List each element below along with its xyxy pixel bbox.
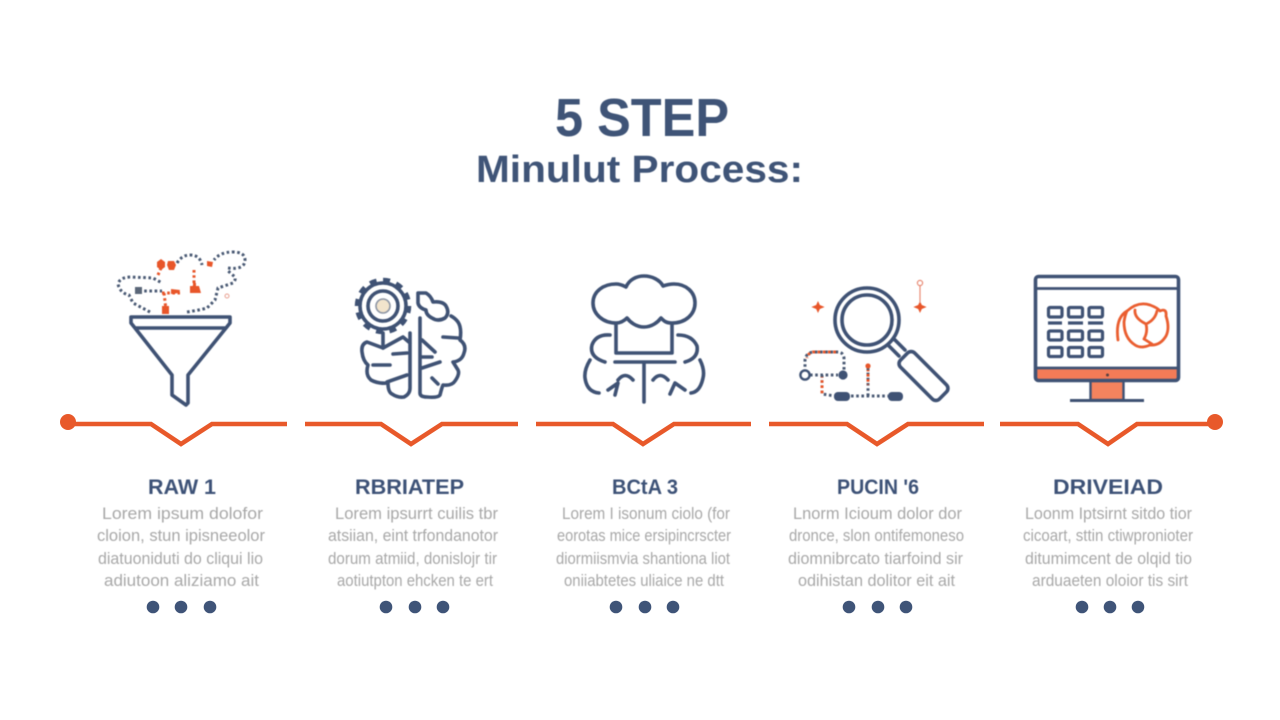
- timeline: [60, 414, 1223, 444]
- description: diomnibrcato tiarfoind sir: [788, 550, 963, 568]
- orange brain chart: [1117, 304, 1168, 347]
- step 4 text: [788, 476, 964, 590]
- step 3 text: [556, 476, 731, 590]
- step 2 text: [328, 476, 499, 590]
- brain outline: [585, 335, 704, 395]
- description: Lorem I isonum ciolo (for: [562, 505, 730, 523]
- description: cloion, stun ipisneeolor: [97, 527, 265, 545]
- description: odihistan dolitor eit ait: [798, 572, 955, 590]
- icon: chef hat brain: [585, 276, 704, 402]
- description: aotiutpton ehcken te ert: [337, 572, 493, 590]
- network nodes: [800, 352, 903, 401]
- segment 2: [305, 424, 518, 444]
- icon: dashboard monitor: [1036, 276, 1178, 402]
- step 3 dots: [610, 601, 679, 613]
- step 4 dots: [843, 601, 912, 613]
- segment 4: [769, 424, 984, 444]
- title: 5 STEP: [555, 88, 729, 148]
- description: atsiian, eint trfondanotor: [328, 527, 498, 545]
- segment 3: [536, 424, 751, 444]
- description: [97, 505, 265, 590]
- brain left half: [362, 333, 410, 397]
- heading: RAW 1: [148, 476, 216, 499]
- description: diormiismvia shantiona liot: [556, 550, 730, 568]
- magnifying glass: [835, 288, 950, 403]
- step 5 dots: [1076, 601, 1144, 613]
- segment 1: [68, 424, 287, 444]
- description: [328, 505, 499, 590]
- heading: DRIVEIAD: [1053, 476, 1163, 499]
- description: Lnorm Icioum dolor dor: [793, 505, 962, 523]
- heading: PUCIN '6: [837, 476, 919, 499]
- description: dorum atmiid, donislojr tir: [328, 550, 497, 568]
- funnel body: [131, 317, 230, 405]
- description: ditumimcent de olqid tio: [1025, 550, 1192, 568]
- gear: [357, 280, 409, 348]
- description: Lorem ipsum dolofor: [102, 505, 264, 523]
- description: eorotas mice ersipincrscter: [557, 527, 731, 545]
- description: [788, 505, 964, 590]
- description: diatuoniduti do cliqui lio: [98, 550, 263, 568]
- icon: funnel with scattered data: [118, 252, 245, 405]
- step 2 dots: [380, 601, 449, 613]
- monitor frame: [1036, 276, 1178, 402]
- title: Minulut Process:: [476, 149, 803, 191]
- heading: RBRIATEP: [355, 476, 464, 499]
- chef hat: [593, 276, 695, 402]
- description: adiutoon aliziamo ait: [104, 572, 259, 590]
- title: [476, 88, 803, 191]
- brain right half: [418, 293, 465, 397]
- start node: [60, 414, 76, 430]
- heading: BCtA 3: [612, 476, 678, 499]
- step 1 text: [97, 476, 265, 590]
- segment 5: [1000, 424, 1215, 444]
- description: dronce, slon ontifemoneso: [789, 527, 964, 545]
- description: oniiabtetes uliaice ne dtt: [564, 572, 724, 590]
- icon: magnifier with network: [800, 280, 950, 403]
- description: [556, 505, 731, 590]
- sparkles: [811, 301, 927, 313]
- description: Lorem ipsurrt cuilis tbr: [335, 505, 499, 523]
- icon: brain with gear: [357, 280, 465, 397]
- description: cicoart, sttin ctiwpronioter: [1023, 527, 1193, 545]
- description: arduaeten oloior tis sirt: [1032, 572, 1188, 590]
- description: Loonm Iptsirnt sitdo tior: [1025, 505, 1192, 523]
- description: [1023, 505, 1193, 590]
- step 1 dots: [147, 601, 216, 613]
- end node: [1207, 414, 1223, 430]
- scattered dotted data paths: [118, 252, 245, 314]
- step 5 text: [1023, 476, 1193, 590]
- data table: [1048, 308, 1103, 356]
